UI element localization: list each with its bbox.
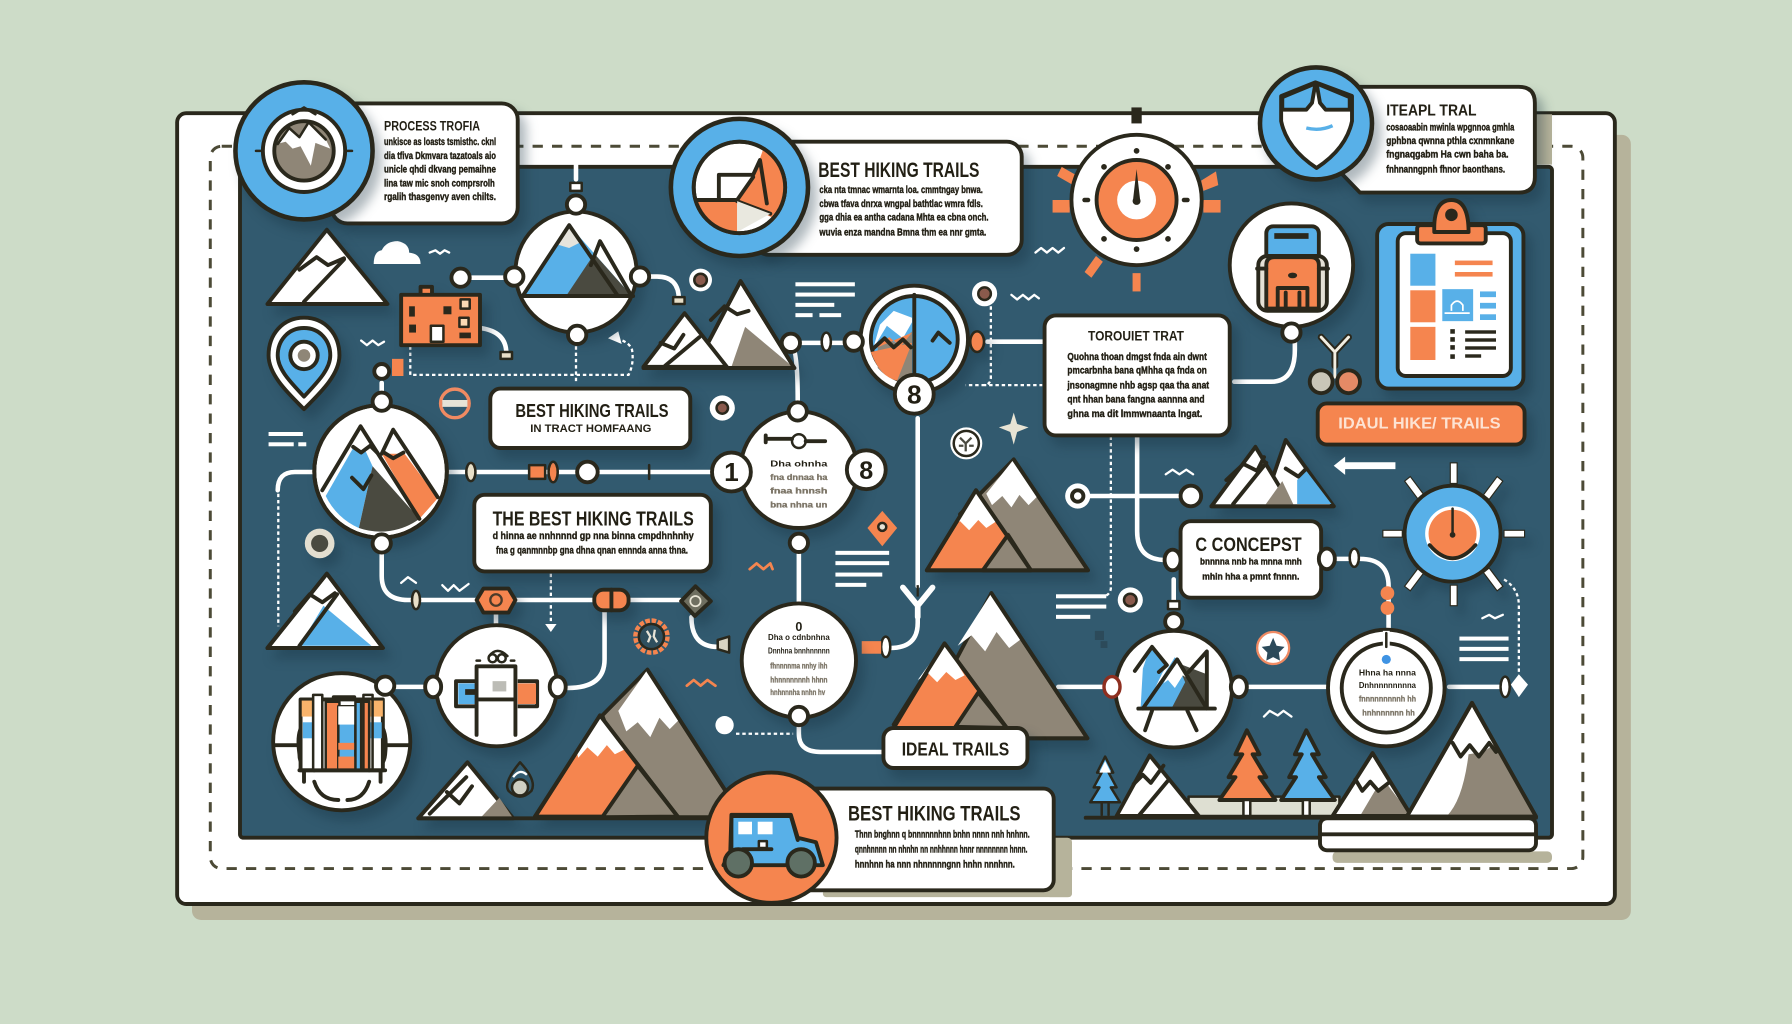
navy map panel: [240, 167, 1552, 838]
label: best hiking trails: IN TRACT HOMFAANG: [530, 423, 651, 435]
icon: clipboard: [1377, 200, 1523, 389]
callout body text: [1067, 352, 1210, 420]
icon: sun compass: [1383, 463, 1525, 606]
icon: orange diamond: [867, 511, 897, 546]
callout title: C CONCEPST: [1195, 534, 1302, 556]
callout body text: fna g qanmnnbp gna dhna qnan ennnda anna thna.: [496, 546, 688, 557]
panel: top right callout: [1343, 87, 1535, 193]
circle panel: lower right text ring: fnnnnnnnnnh hh: [1359, 694, 1416, 704]
icon: backpack circle: [1230, 203, 1353, 327]
icon: split mountain circle: [861, 286, 984, 393]
callout body text: qnt hhan bana fangna aannna and: [1067, 394, 1205, 405]
text lines decoration: [835, 551, 889, 587]
label: ideal trails: [883, 728, 1027, 768]
icon: left mountain circle: [314, 405, 447, 538]
circle panel: lower centre: [742, 603, 856, 718]
icon: white dot: [715, 716, 734, 734]
circle panel: lower right text ring: [1328, 630, 1445, 746]
text lines decoration: [1056, 594, 1106, 619]
callout body text: fnhnanngpnh fhnor baonthans.: [1386, 165, 1505, 176]
callout body text: qnnhnnnn nn nhnhn nn nnhhnnn hnnr nnnnnnnn hnnn.: [855, 845, 1028, 856]
mountain: white and grey: [1333, 753, 1411, 816]
icon: gauge with rays: [1053, 107, 1221, 291]
arrow: left: [1334, 457, 1395, 475]
icon: orange jeep badge: [706, 773, 837, 903]
tree: orange: [1219, 730, 1275, 816]
hill band: [1189, 797, 1339, 816]
callout body text: fngnaqgabm Ha cwn baha ba.: [1386, 150, 1509, 161]
squiggle: [361, 341, 384, 345]
label: best hiking trails: [490, 389, 690, 448]
circle panel: step one three: bna nhna un: [770, 500, 828, 509]
mountain: small white: [1117, 755, 1199, 816]
mountain: large right: [1407, 703, 1536, 817]
number badge 8: 8: [859, 457, 873, 485]
label: best hiking trails: BEST HIKING TRAILS: [515, 400, 669, 421]
icon: best hiking trails blue badge: [671, 119, 808, 256]
connector icons on trail: [477, 586, 711, 616]
callout body text: ghna ma dit lmmwnaanta lngat.: [1067, 409, 1203, 420]
number badge 1: 1: [724, 457, 739, 487]
circle panel: lower centre: hhnnnnnnnh hhnn: [770, 675, 828, 684]
callout body text: cosaoaabin mwinla wpgnnoa gmhla: [1386, 122, 1515, 133]
callout title: BEST HIKING TRAILS: [818, 159, 979, 182]
mountains: small right pair: [1211, 440, 1334, 506]
circle panel: lower centre: Dnnhna bnnhnnnnn: [768, 646, 830, 656]
callout body text: [819, 185, 989, 238]
callout body text: mhin hha a pmnt fnnnn.: [1202, 571, 1299, 581]
callout title: TOROUIET TRAT: [1088, 329, 1185, 344]
number badge 8: [895, 375, 934, 414]
callout body text: gga dhia ea antha cadana Mhta ea cbna onch.: [819, 213, 989, 224]
icon: top left blue badge: [235, 82, 373, 219]
label: ideal hike trails: IDAUL HIKE/ TRAILS: [1338, 416, 1501, 433]
callout body text: lina taw mic snoh comprsrolh: [384, 178, 495, 189]
panel: toroujet trat callout: [1045, 315, 1230, 435]
callout body text: cka nta tmnac wmarnta loa. cmmtngay bnwa.: [819, 185, 983, 196]
mountain: bottom left blue: [267, 574, 383, 648]
icon: orange building: [401, 287, 480, 345]
callout body text: [1200, 557, 1302, 581]
callout title: THE BEST HIKING TRAILS: [493, 508, 694, 531]
mountains: bottom left large: [418, 670, 731, 818]
icon: badge: [950, 427, 982, 459]
mountain: upper left outline: [267, 230, 387, 304]
callout body text: [493, 531, 694, 557]
connector lines: [278, 158, 1503, 752]
circle panel: lower centre: fhnnnnma nnhy ihh: [770, 662, 828, 671]
callout body text: wuvia enza mandna Bmna thm ea nnr gmta.: [819, 227, 986, 238]
circle panel: step one three: Dha ohnha: [770, 459, 828, 468]
circle panel: lower right text ring: Hhna ha nnna: [1359, 667, 1416, 677]
squiggle: [430, 250, 449, 254]
icon: orange gear: [635, 621, 667, 653]
icon: gear: [305, 529, 335, 558]
callout body text: cbwa tfava dnrxa wngpal bathtlac wmra fdls.: [819, 199, 983, 210]
callout body text: [384, 137, 496, 203]
panel: bottom callout: [789, 789, 1054, 890]
tree: blue: [1281, 730, 1335, 816]
mountains: ideal trails: [894, 593, 1087, 738]
icon: mountain circle node: [515, 211, 637, 333]
callout body text: bnnnna nnb ha mnna mnh: [1200, 557, 1302, 567]
callout body text: rgalih thasgenvy aven chilts.: [384, 192, 496, 203]
circle panel: lower centre: Dha o cdnbnhna: [768, 632, 830, 642]
callout title: ITEAPL TRAL: [1386, 102, 1477, 119]
icon: backpack circle bottom left: [273, 673, 410, 810]
circle panel: lower right text ring: hnhnnnnnn hh: [1362, 707, 1415, 717]
number badge 8: [847, 450, 886, 489]
card shadow: [192, 135, 1631, 920]
callout body text: d hinna ae nnhnnnd gp nna binna cmpdhnhnhy: [493, 531, 694, 542]
circle panel: lower centre: hnhnnnha nnhn hv: [770, 688, 826, 697]
circle panel: step one three: [741, 411, 857, 528]
small badges: [689, 269, 1143, 613]
gauge rays: [1053, 167, 1221, 291]
icon: mountain easel circle: [1115, 631, 1232, 747]
number badge 1: [712, 453, 751, 491]
icon: drop: [507, 762, 533, 797]
circle panel: step one three: fna dnnaa ha: [770, 473, 828, 482]
dark tiles: [1095, 631, 1107, 648]
icon: trekking tool: [1310, 337, 1360, 393]
panel: the best hiking trails: [474, 495, 711, 571]
icon: orange ring badge: [441, 389, 469, 418]
icon: map stand circle: [436, 625, 557, 746]
squiggle: [1011, 295, 1039, 299]
tree: small: [1090, 757, 1120, 815]
stand platform: [1320, 818, 1536, 850]
circle panel: lower centre: 0: [795, 620, 802, 634]
flag node: [374, 359, 403, 379]
callout body text: jnsonagmne nhb agsp qaa tha anat: [1067, 381, 1210, 392]
label: ideal hike trails: [1318, 403, 1525, 445]
number badge 8: 8: [907, 379, 922, 409]
callout body text: Quohna thoan dmgst fnda ain dwnt: [1067, 352, 1207, 363]
icon: cloud: [374, 241, 421, 264]
connector fittings: [412, 183, 1528, 697]
panel: best hiking trails callout: [754, 142, 1022, 255]
callout shadow areas on the white card: [823, 114, 1552, 897]
landscape: trees and mountains: [1086, 703, 1536, 818]
text lines decoration: [795, 282, 855, 317]
callout body text: gphbna qwnna pthla cxnmnkane: [1386, 136, 1515, 147]
icon: sparkle star: [999, 413, 1029, 445]
circle panel: lower right text ring: Dnhnnnnnnnna: [1359, 680, 1416, 690]
callout body text: [1386, 122, 1515, 176]
callout body text: Thnn bnghnn q bnnnnnnhnn bnhn nnnn nnh hnhnn.: [855, 830, 1030, 841]
text lines decoration: [1459, 637, 1509, 661]
panel: concept: [1181, 521, 1321, 598]
callout body text: dia tfiva Dkmvara tazatoals aio: [384, 151, 496, 162]
callout body text: unkisce as loasts tsmisthc. cknl: [384, 137, 496, 148]
text lines decoration: [269, 432, 306, 446]
icon: star badge: [1257, 632, 1289, 664]
squiggles: [401, 470, 1503, 717]
icon: Y trail fork: [903, 585, 933, 617]
callout body text: pmcarbnha bana qMhha qa fnda on: [1067, 366, 1207, 377]
callout body text: unicle qhdi dkvang pemaihne: [384, 165, 496, 176]
outer white map card: [177, 113, 1615, 904]
label: ideal trails: IDEAL TRAILS: [902, 738, 1009, 759]
circle panel: step one three: fnaa hnnsh: [770, 487, 828, 496]
callout title: PROCESS TROFIA: [384, 118, 480, 133]
squiggle: [1035, 248, 1064, 253]
panel: top left callout: [331, 103, 518, 223]
mountains: centre pair: [927, 459, 1088, 570]
callout body text: [855, 830, 1030, 870]
connector nodes over circles: [373, 195, 1335, 725]
icon: shield badge: [1260, 67, 1372, 179]
dashed inner border: [210, 146, 1583, 869]
ground line: [1086, 816, 1536, 819]
mountains: twin peaks with connector: [643, 281, 794, 368]
callout body text: hnnhnn ha nnn nhnnnnngnn hnhn nnnhnn.: [855, 859, 1015, 870]
callout title: BEST HIKING TRAILS: [848, 803, 1021, 826]
dashed trail lines: [278, 306, 1519, 734]
icon: map pin: [269, 318, 339, 409]
